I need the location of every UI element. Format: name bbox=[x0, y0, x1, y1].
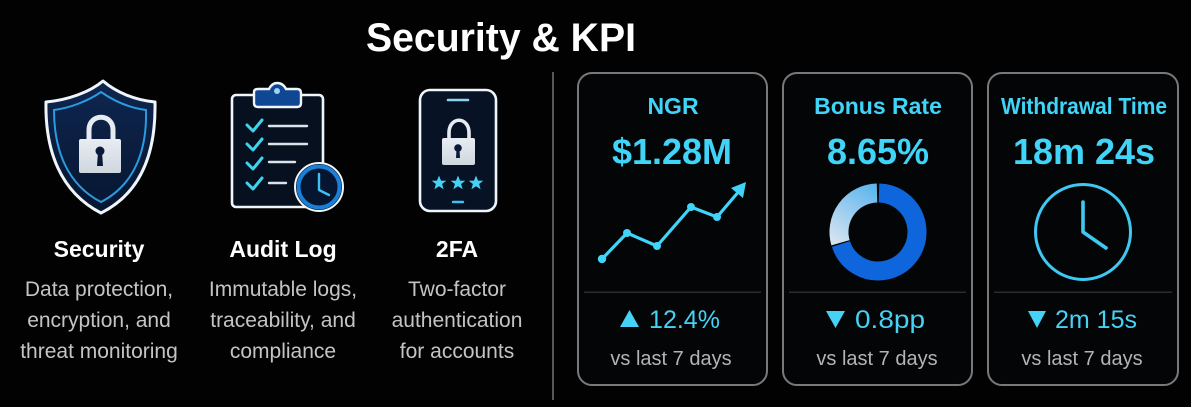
panel: Bonus Rate card bbox=[783, 73, 972, 385]
panel: audit log bbox=[209, 83, 357, 363]
heading: Audit Log: Audit Log bbox=[229, 236, 337, 262]
text: 2FA description bbox=[392, 278, 522, 363]
icon: phone with lock bbox=[420, 90, 496, 211]
value: 8.65%: 8.65% bbox=[827, 131, 929, 172]
text: 2FA description: authentication bbox=[392, 309, 522, 332]
label: Withdrawal Time: Withdrawal Time bbox=[1001, 93, 1167, 119]
panel: NGR card bbox=[578, 73, 767, 385]
text: audit log description: compliance bbox=[230, 340, 336, 363]
text: audit log description: Immutable logs, bbox=[209, 278, 357, 301]
change: down 2m 15s: 2m 15s bbox=[1055, 306, 1137, 334]
change: down 0.8pp bbox=[826, 306, 925, 334]
icon: clock bbox=[1036, 184, 1130, 280]
text: security description: threat monitoring bbox=[20, 340, 178, 363]
panel: 2FA bbox=[392, 90, 522, 363]
divider bbox=[552, 72, 554, 400]
text: security description: Data protection, bbox=[25, 278, 173, 301]
change: up 12.4%: 12.4% bbox=[649, 306, 720, 334]
panel: Withdrawal Time card bbox=[988, 73, 1178, 385]
value: $1.28M: $1.28M bbox=[612, 131, 732, 172]
panel: security bbox=[20, 81, 178, 363]
text: audit log description bbox=[209, 278, 357, 363]
icon: clipboard with clock bbox=[232, 83, 343, 211]
caption: vs last 7 days bbox=[816, 348, 938, 370]
label: NGR: NGR bbox=[647, 93, 699, 119]
value: 18m 24s: 18m 24s bbox=[1013, 131, 1155, 172]
caption: vs last 7 days bbox=[1021, 348, 1143, 370]
text: security description: encryption, and bbox=[27, 309, 171, 332]
heading: 2FA: 2FA bbox=[436, 236, 478, 262]
text: 2FA description: for accounts bbox=[400, 340, 514, 363]
caption: vs last 7 days bbox=[610, 348, 732, 370]
change: down 0.8pp: 0.8pp bbox=[855, 306, 925, 334]
donut chart bbox=[839, 193, 917, 271]
text: audit log description: traceability, and bbox=[210, 309, 356, 332]
line chart: rising trend bbox=[598, 182, 746, 263]
text: 2FA description: Two-factor bbox=[408, 278, 506, 301]
heading: Security: Security bbox=[54, 236, 145, 262]
label: Bonus Rate: Bonus Rate bbox=[814, 93, 942, 119]
text: security description bbox=[20, 278, 178, 363]
icon: shield with lock bbox=[46, 81, 155, 213]
title: Security & KPI bbox=[366, 16, 636, 60]
